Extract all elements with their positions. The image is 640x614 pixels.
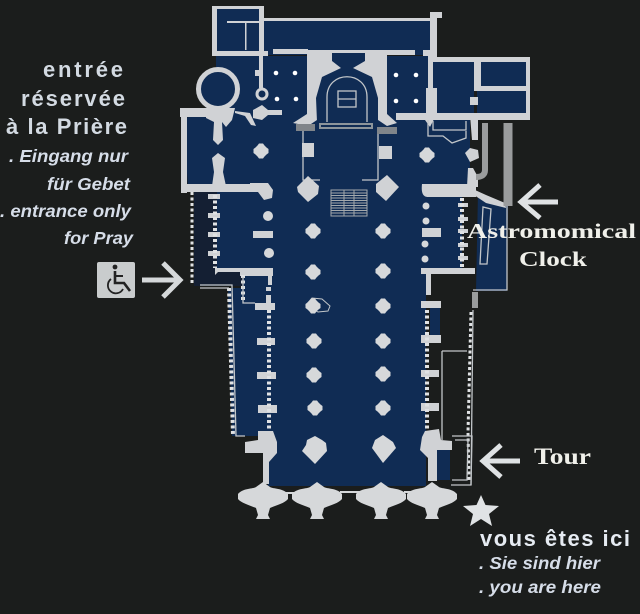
label: you are here: . Sie sind hier <box>479 553 601 573</box>
thin lines <box>200 77 507 485</box>
choir piers and grey bars <box>296 124 399 202</box>
floor plan <box>180 6 530 519</box>
heading: prayer entrance text: entrée <box>43 57 123 82</box>
walls <box>180 6 530 484</box>
heading: prayer entrance text: für Gebet <box>47 174 131 194</box>
heading: prayer entrance text: à la Prière <box>6 114 127 139</box>
towers <box>245 431 277 484</box>
nave side walls and pilasters <box>215 268 273 285</box>
west facade buttresses <box>238 482 457 519</box>
label: tower: Tour <box>534 444 591 469</box>
stairs <box>331 190 367 216</box>
label: astronomical clock: Astromomical <box>467 219 636 243</box>
label: you are here <box>479 526 630 597</box>
label: you are here: . you are here <box>479 577 601 597</box>
heading: prayer entrance text <box>0 57 134 248</box>
icon: wheelchair <box>97 262 135 298</box>
arrow: to tower <box>483 445 520 477</box>
window columns <box>192 192 471 482</box>
grey corridors <box>475 123 508 308</box>
heading: prayer entrance text: for Pray <box>64 228 134 248</box>
blue floors <box>184 9 529 486</box>
label: you are here: vous êtes ici <box>480 526 630 551</box>
arrow: to entrance <box>142 263 180 297</box>
dark aisle <box>194 191 243 286</box>
nave piers <box>254 71 434 464</box>
icon: star <box>463 495 499 526</box>
apse niche <box>316 53 378 122</box>
heading: prayer entrance text: . entrance only <box>0 201 132 221</box>
label: astronomical clock <box>467 219 636 271</box>
arrow: to astronomical clock <box>521 185 558 218</box>
label: astronomical clock: Clock <box>519 247 587 271</box>
heading: prayer entrance text: . Eingang nur <box>9 146 129 166</box>
heading: prayer entrance text: réservée <box>21 86 125 111</box>
